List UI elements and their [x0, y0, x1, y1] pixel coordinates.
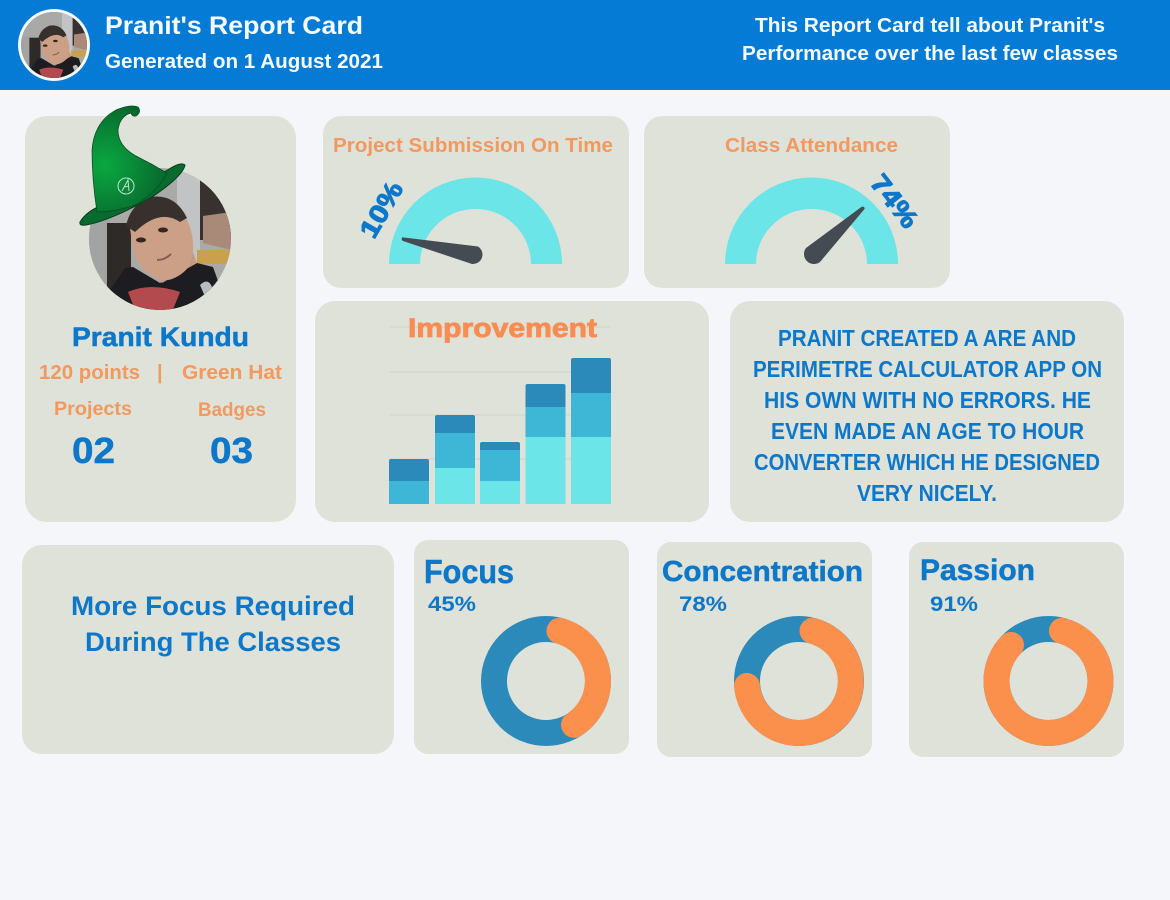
donut chart: [494, 629, 598, 733]
stacked bar chart: [389, 327, 611, 504]
achievement text: EVEN MADE AN AGE TO HOUR: [771, 418, 1084, 444]
panel: class attendance gauge: [644, 116, 950, 288]
header avatar photo: [17, 8, 91, 83]
achievement text: VERY NICELY.: [857, 480, 997, 506]
focus heading: Focus: [424, 553, 514, 590]
points and hat: |: [157, 362, 163, 384]
points and hat: [39, 362, 282, 384]
gauge value: 10%: [353, 176, 409, 243]
concentration heading: Concentration: [662, 556, 863, 588]
header description: Performance over the last few classes: [742, 43, 1118, 65]
remark text: [71, 591, 355, 657]
panel: student profile: [25, 106, 296, 522]
badges count: Badges: [198, 400, 266, 421]
achievement text: [753, 325, 1102, 506]
icon: green wizard hat: [80, 106, 185, 225]
projects count: Projects: [54, 399, 132, 420]
badges count: 03: [210, 430, 253, 471]
achievement text: CONVERTER WHICH HE DESIGNED: [754, 449, 1100, 475]
points and hat: Green Hat: [182, 362, 282, 384]
header description: [742, 15, 1118, 65]
header banner: [0, 0, 1170, 90]
panel: concentration donut: [657, 542, 872, 757]
gauge needle: [402, 238, 482, 264]
panel: passion donut: [909, 542, 1124, 757]
donut chart: [996, 629, 1101, 733]
gauge heading: Class Attendance: [725, 134, 898, 157]
panel: improvement chart: [315, 301, 709, 522]
student photo: [89, 168, 231, 310]
panel: achievement note: [730, 301, 1124, 522]
generated date: Generated on 1 August 2021: [105, 51, 383, 73]
points and hat: 120 points: [39, 362, 140, 384]
passion heading: Passion: [920, 554, 1035, 587]
chart heading: Improvement: [408, 313, 597, 343]
badges count: [198, 400, 266, 471]
panel: focus donut: [414, 540, 629, 754]
gauge arc: [725, 177, 898, 264]
projects count: [54, 399, 132, 471]
student name: Pranit Kundu: [72, 322, 249, 352]
remark text: During The Classes: [85, 627, 341, 657]
panel: focus remark: [22, 545, 394, 754]
gauge needle: [804, 207, 865, 264]
projects count: 02: [72, 430, 115, 471]
achievement text: PERIMETRE CALCULATOR APP ON: [753, 356, 1102, 382]
header description: This Report Card tell about Pranit's: [755, 15, 1105, 37]
focus value: 45%: [428, 593, 476, 616]
achievement text: PRANIT CREATED A ARE AND: [778, 325, 1076, 351]
achievement text: HIS OWN WITH NO ERRORS. HE: [764, 387, 1091, 413]
gauge arc: [389, 177, 562, 264]
gauge value: 74%: [864, 168, 925, 234]
concentration value: 78%: [679, 593, 727, 616]
donut chart: [747, 629, 851, 733]
report title: Pranit's Report Card: [105, 12, 363, 40]
remark text: More Focus Required: [71, 591, 355, 621]
panel: project submission gauge: [323, 116, 629, 288]
gauge heading: Project Submission On Time: [333, 134, 613, 157]
passion value: 91%: [930, 593, 978, 616]
